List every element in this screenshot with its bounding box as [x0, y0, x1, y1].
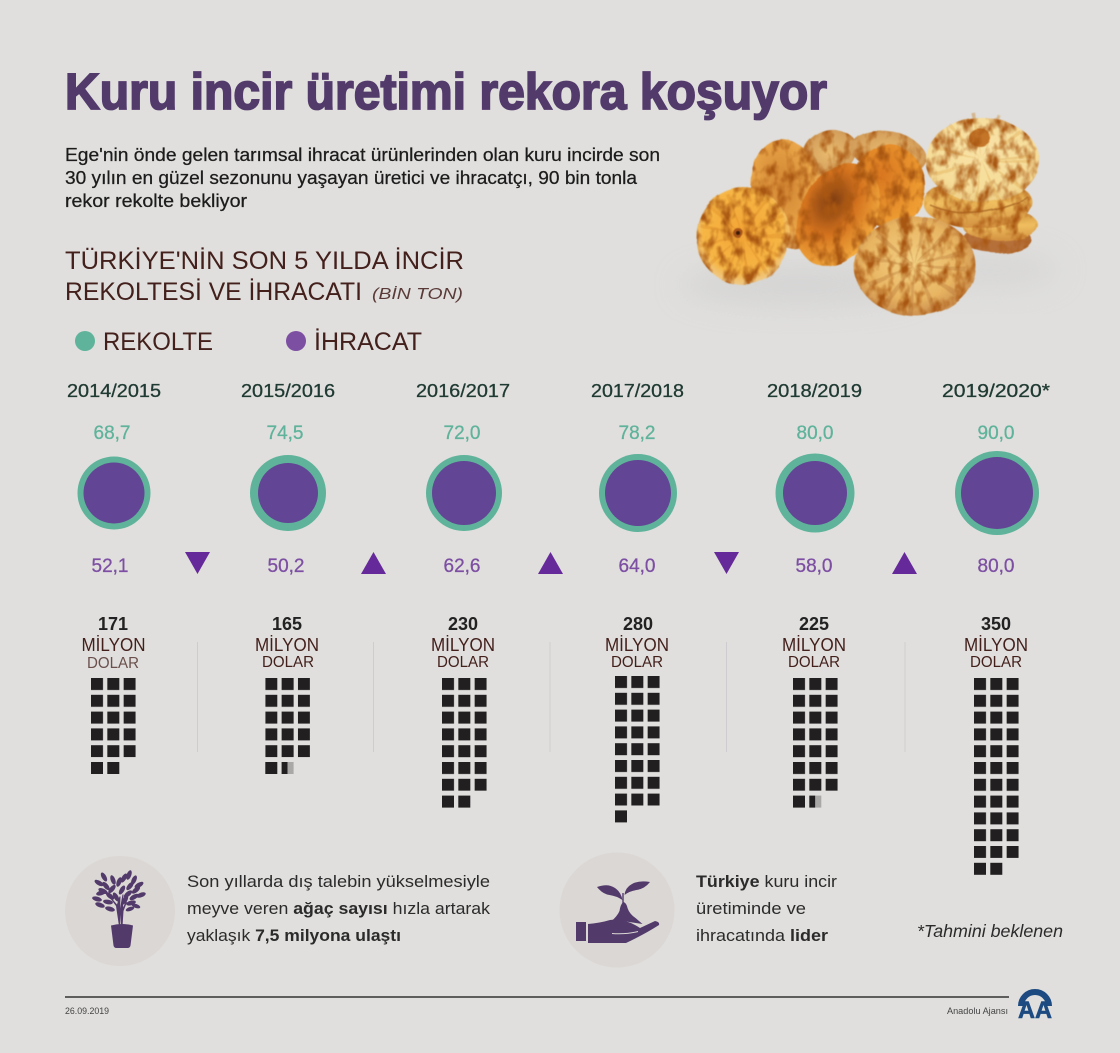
column: 2015/2016	[241, 380, 335, 774]
column: 2016/2017: 230	[448, 614, 478, 634]
text: tree count	[187, 872, 491, 945]
fig: back centre	[796, 122, 864, 184]
column: 2015/2016: MİLYON	[255, 634, 319, 655]
intro text: Ege'nin önde gelen tarımsal ihracat ürünlerinden olan kuru incirde son	[65, 145, 660, 165]
fig stack: top	[925, 118, 1039, 202]
date: 26.09.2019	[65, 1006, 109, 1017]
column: 2017/2018: DOLAR	[611, 654, 663, 671]
intro text: rekor rekolte bekliyor	[65, 191, 247, 211]
intro text	[65, 145, 660, 211]
legend item: ihracat: İHRACAT	[314, 327, 422, 356]
fig: back right	[846, 124, 930, 180]
icon: potted fig tree	[65, 856, 175, 966]
column: 2016/2017	[416, 380, 510, 808]
fig stack: middle	[923, 178, 1033, 228]
column: 2017/2018: 2017/2018	[591, 380, 684, 401]
column: 2017/2018: 280	[623, 614, 653, 634]
column: 2014/2015: DOLAR	[87, 655, 139, 672]
text: tree count: meyve veren ağaç sayısı hızla artarak	[187, 899, 491, 918]
column: 2016/2017: 72,0	[444, 423, 480, 444]
heading: production and export: (BİN TON)	[372, 284, 463, 303]
column: 2018/2019	[767, 380, 862, 808]
trend arrow: up	[361, 552, 386, 574]
column: 2014/2015: MİLYON	[82, 634, 146, 655]
intro text: 30 yılın en güzel sezonunu yaşayan üretici ve ihracatçı, 90 bin tonla	[65, 168, 638, 188]
column: 2017/2018: 78,2	[619, 423, 655, 444]
heading: production and export: TÜRKİYE'NİN SON 5 YILDA İNCİR	[65, 246, 464, 275]
legend	[75, 327, 422, 356]
agency name: Anadolu Ajansı	[947, 1006, 1008, 1017]
column: 2019/2020: 2019/2020*	[942, 380, 1050, 401]
heading: production and export	[65, 246, 464, 306]
column: 2015/2016: DOLAR	[262, 654, 314, 671]
column: 2018/2019: 58,0	[796, 556, 832, 577]
text: tree count: yaklaşık 7,5 milyona ulaştı	[187, 926, 401, 945]
trend arrow: down	[714, 552, 739, 574]
trend arrow: up	[538, 552, 563, 574]
text: Türkiye leader: Türkiye kuru incir	[696, 872, 837, 891]
fig: centre dark	[779, 149, 897, 281]
text: Türkiye leader	[696, 872, 837, 945]
column: 2015/2016: 74,5	[267, 423, 303, 444]
column: 2017/2018	[591, 380, 684, 822]
column: 2018/2019: 225	[799, 614, 829, 634]
column: 2016/2017: 2016/2017	[416, 380, 510, 401]
column: 2016/2017: 62,6	[444, 556, 480, 577]
logo: Anadolu Ajansı: AA	[1018, 997, 1052, 1024]
column: 2015/2016: 2015/2016	[241, 380, 335, 401]
column: 2018/2019: 2018/2019	[767, 380, 862, 401]
trend arrow: up	[892, 552, 917, 574]
column: 2019/2020	[942, 380, 1050, 875]
fig: front left	[696, 187, 790, 285]
column: 2019/2020: MİLYON	[964, 634, 1028, 655]
column: 2019/2020: 80,0	[978, 556, 1014, 577]
column: 2018/2019: DOLAR	[788, 654, 840, 671]
column: 2014/2015: 171	[98, 614, 128, 634]
text: Türkiye leader: üretiminde ve	[696, 899, 806, 918]
trend arrow: down	[185, 552, 210, 574]
fig: upper middle	[853, 145, 925, 227]
fig: upper left	[741, 133, 837, 257]
text: tree count: Son yıllarda dış talebin yükselmesiyle	[187, 872, 490, 891]
column: 2014/2015: 68,7	[94, 423, 130, 444]
title: Kuru incir üretimi rekora koşuyor	[65, 63, 827, 120]
column: 2019/2020: 90,0	[978, 423, 1014, 444]
icon: hand with sprout	[560, 852, 674, 968]
text: Türkiye leader: ihracatında lider	[696, 926, 828, 945]
legend item: rekolte: REKOLTE	[103, 328, 213, 356]
heading: production and export: REKOLTESİ VE İHRACATI	[65, 277, 362, 306]
column: 2016/2017: MİLYON	[431, 634, 495, 655]
column: 2015/2016: 165	[272, 614, 302, 634]
footnote: *Tahmini beklenen	[917, 921, 1063, 941]
column: 2017/2018: MİLYON	[605, 634, 669, 655]
column: 2014/2015: 2014/2015	[67, 380, 161, 401]
column: 2016/2017: DOLAR	[437, 654, 489, 671]
column: 2017/2018: 64,0	[619, 556, 655, 577]
fig stack: bottom	[963, 225, 1031, 253]
column: 2019/2020: 350	[981, 614, 1011, 634]
fig stack: lower	[962, 209, 1038, 241]
column: 2019/2020: DOLAR	[970, 654, 1022, 671]
column: 2018/2019: MİLYON	[782, 634, 846, 655]
column: 2014/2015	[67, 380, 161, 774]
column: 2015/2016: 50,2	[268, 556, 304, 577]
column: 2014/2015: 52,1	[92, 556, 128, 577]
image: dried figs	[680, 118, 1060, 316]
column: 2018/2019: 80,0	[797, 423, 833, 444]
fig: front centre	[854, 216, 976, 316]
